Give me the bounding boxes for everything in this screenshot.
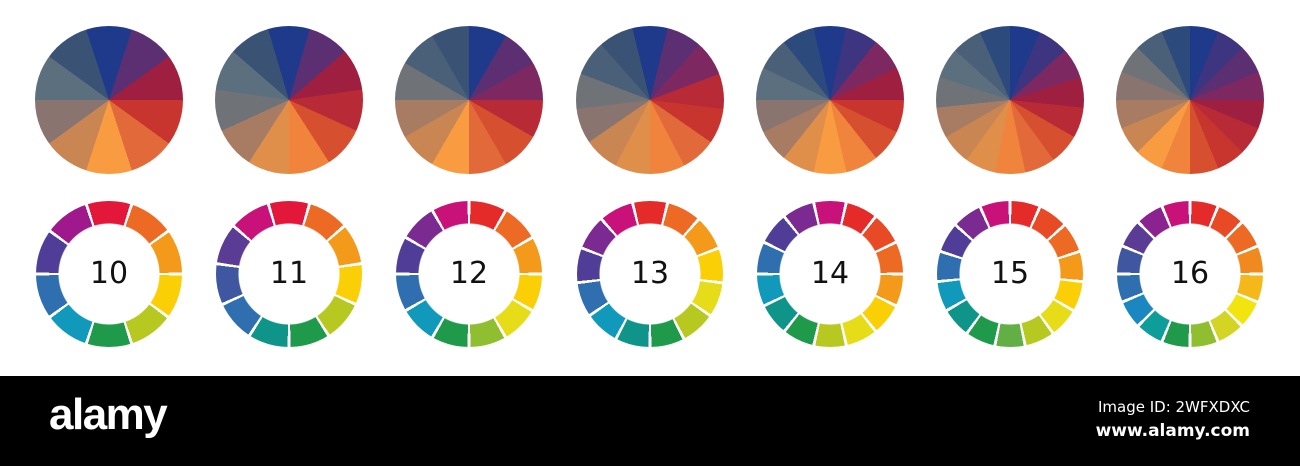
label 13: 13 xyxy=(631,256,669,291)
ring 16 xyxy=(1117,201,1263,347)
pie 13 xyxy=(576,26,724,174)
ring 10 xyxy=(36,201,182,347)
label 16: 16 xyxy=(1171,256,1209,291)
label 15: 15 xyxy=(991,256,1029,291)
label 11: 11 xyxy=(270,256,308,291)
ring 13 xyxy=(577,201,723,347)
pie 15 xyxy=(936,26,1084,174)
pie 11 xyxy=(215,26,363,174)
label 12: 12 xyxy=(450,256,488,291)
footer bar xyxy=(0,376,1300,466)
ring 15 xyxy=(937,201,1083,347)
pie 16 xyxy=(1116,26,1264,174)
pie 12 xyxy=(395,26,543,174)
ring 11 xyxy=(216,201,362,347)
label 10: 10 xyxy=(90,256,128,291)
image id: Image ID: 2WFXDXC xyxy=(1098,398,1250,416)
label 14: 14 xyxy=(811,256,849,291)
pie 14 xyxy=(756,26,904,174)
url: www.alamy.com xyxy=(1096,421,1250,441)
ring 12 xyxy=(396,201,542,347)
logo: alamy: alamy xyxy=(49,390,166,439)
pie 10 xyxy=(35,26,183,174)
ring 14 xyxy=(757,201,903,347)
